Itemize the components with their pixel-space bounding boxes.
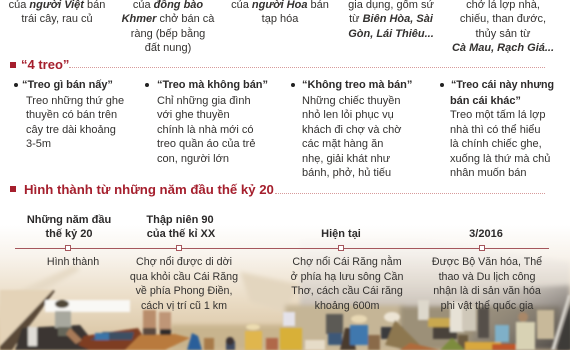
timeline entry: early 20th century: Hình thành (47, 256, 99, 268)
panel: Treo cái này nhưng bán cái khác: xuống là thứ mà chủ (450, 153, 550, 165)
panel: Treo mà không bán (145, 79, 268, 165)
timeline entry: present: ở phía hạ lưu sông Cần (291, 271, 403, 283)
panel: Không treo mà bán: khách đi chợ và chờ (302, 124, 401, 136)
timeline entry: March 2016 (432, 228, 542, 312)
panel: Treo gì bán nấy (14, 79, 124, 150)
timeline entry: 1990s: Chợ nổi được di dời (136, 256, 232, 268)
panel: Không treo mà bán: Những chiếc thuyền (302, 95, 400, 107)
panel: Treo gì bán nấy: Treo những thứ ghe (26, 95, 124, 107)
heading: Hình thành từ những năm đầu thế kỷ 20: Hình thành từ những năm đầu thế kỷ 20 (24, 182, 274, 197)
panel: Treo mà không bán: với ghe thuyền (157, 109, 230, 121)
timeline (15, 214, 549, 312)
panel: Không treo mà bán: các mặt hàng ăn (302, 138, 383, 150)
timeline entry: 1990s: về phía Phong Điền, (136, 285, 232, 297)
text: Vietnamese vendors (9, 0, 105, 25)
heading: 4 treo (10, 57, 545, 72)
panel: Treo cái này nhưng bán cái khác: nhân muốn bán (450, 167, 526, 179)
text: Mekong goods vendors: chiếu, than đước, (460, 13, 546, 25)
timeline entry: 1990s: qua khỏi cầu Cái Răng (130, 271, 238, 283)
text: Mekong goods vendors: thủy sản từ (475, 28, 531, 40)
panel: Treo cái này nhưng bán cái khác: bán cái khác” (450, 95, 521, 107)
text: Mekong goods vendors: Cà Mau, Rạch Giá... (452, 42, 554, 54)
heading: Hình thành từ những năm đầu thế kỷ 20 (10, 182, 545, 197)
timeline entry: present: khoảng 600m (315, 300, 379, 312)
timeline entry: present: Chợ nổi Cái Răng nằm (292, 256, 402, 268)
text: Khmer vendors (122, 0, 214, 54)
text: Khmer vendors: ràng (bếp bằng (131, 28, 205, 40)
text: household goods vendors (348, 0, 434, 40)
panel: Không treo mà bán: nhẹ, giải khát như (302, 153, 390, 165)
timeline entry: March 2016: nhận là di sản văn hóa (433, 285, 541, 297)
panel: Treo mà không bán: con, người lớn (157, 153, 229, 165)
text: household goods vendors: từ Biên Hòa, Sài (349, 13, 433, 25)
panel: Treo cái này nhưng bán cái khác: là chính chiếc ghe, (450, 138, 542, 150)
panel: Không treo mà bán (291, 79, 412, 179)
panel: Treo mà không bán: “Treo mà không bán” (157, 79, 268, 91)
text: Chinese vendors (231, 0, 329, 25)
panel: Treo mà không bán: Chỉ những gia đình (157, 95, 251, 107)
panel: Treo cái này nhưng bán cái khác (440, 79, 554, 179)
panel: Không treo mà bán: bánh, phở, hủ tiếu (302, 167, 391, 179)
timeline entry: early 20th century: thế kỷ 20 (45, 228, 93, 240)
timeline entry: 1990s: Thập niên 90 (146, 214, 214, 226)
panel: Treo mà không bán: treo quần áo của trẻ (157, 138, 255, 150)
panel: Treo cái này nhưng bán cái khác: nhà thì có thể hiểu (450, 124, 541, 136)
top row: vendor descriptions (9, 0, 554, 54)
text: Mekong goods vendors (452, 0, 554, 54)
text: Khmer vendors: đất nung) (145, 42, 191, 54)
heading: 4 treo: “4 treo” (21, 57, 69, 72)
panel: Treo gì bán nấy: thuyền có bán trên (26, 109, 117, 121)
timeline entry: early 20th century (27, 214, 111, 268)
panel: Treo gì bán nấy: cây tre dài khoảng (26, 124, 116, 136)
panel: Treo cái này nhưng bán cái khác: Treo một tấm lá lợp (450, 109, 545, 121)
panel: Treo gì bán nấy: “Treo gì bán nấy” (22, 79, 113, 91)
panel: Không treo mà bán: “Không treo mà bán” (302, 79, 412, 91)
text: household goods vendors: Gòn, Lái Thiêu... (348, 28, 434, 40)
timeline entry: early 20th century: Những năm đầu (27, 214, 111, 226)
timeline entry: March 2016: Được Bộ Văn hóa, Thể (432, 256, 542, 268)
timeline entry: March 2016: 3/2016 (469, 228, 503, 240)
timeline entry: present (291, 228, 403, 312)
panel: Treo gì bán nấy: 3-5m (26, 138, 51, 150)
timeline entry: 1990s: của thế kỉ XX (147, 228, 215, 240)
panel: Treo cái này nhưng bán cái khác: “Treo cái này nhưng (451, 79, 554, 91)
panel: Không treo mà bán: nhỏ len lỏi phục vụ (302, 109, 394, 121)
timeline entry: 1990s (130, 214, 238, 312)
panel: Treo mà không bán: chính là nhà mới có (157, 124, 254, 136)
timeline entry: present: Hiện tại (321, 228, 361, 240)
timeline entry: March 2016: phi vật thể quốc gia (441, 300, 533, 312)
text: Chinese vendors: tạp hóa (262, 13, 298, 25)
text: Khmer vendors: Khmer chở bán cà (122, 13, 214, 25)
timeline entry: present: Thơ, cách cầu Cái răng (291, 285, 403, 297)
timeline entry: 1990s: cách vị trí cũ 1 km (141, 300, 227, 312)
timeline entry: March 2016: thao và Du lịch công (439, 271, 535, 283)
text: Vietnamese vendors: trái cây, rau củ (21, 13, 93, 25)
